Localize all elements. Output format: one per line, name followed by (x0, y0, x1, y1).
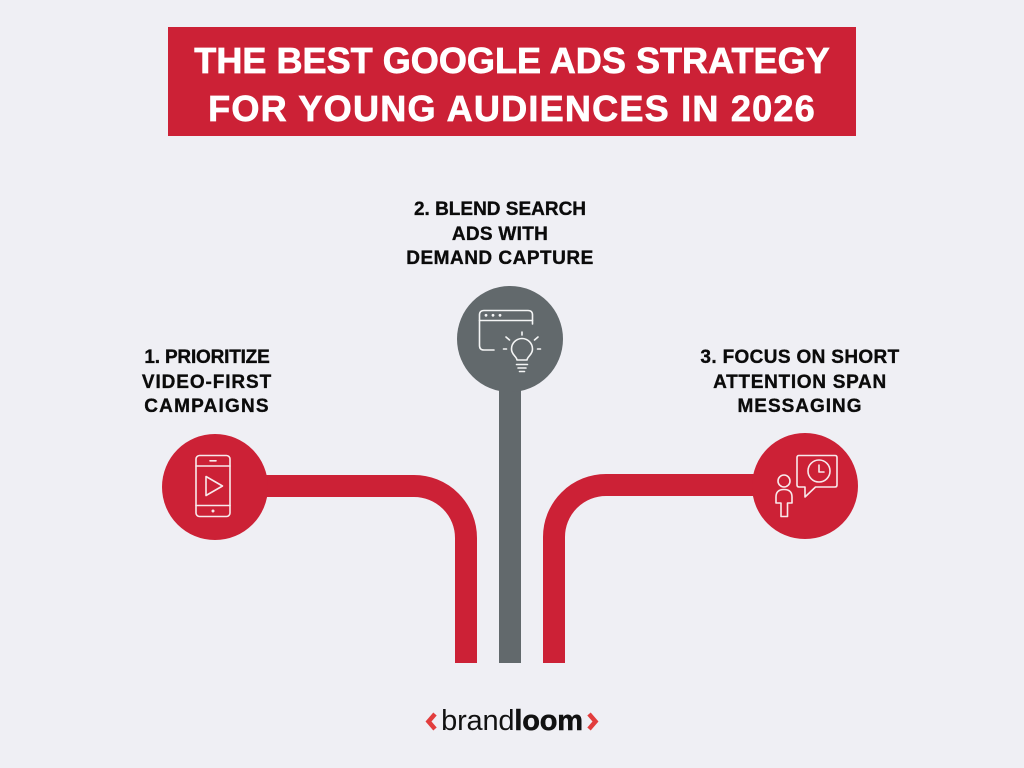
icon: step 1 phone with play (162, 434, 268, 540)
label: step 3: ATTENTION SPAN (713, 372, 887, 392)
label: step 3 (700, 347, 900, 417)
label: step 1: VIDEO-FIRST (142, 372, 272, 392)
title banner (168, 27, 856, 136)
title banner: FOR YOUNG AUDIENCES IN 2026 (208, 88, 816, 129)
label: step 1: 1. PRIORITIZE (144, 347, 270, 368)
logo chevrons (428, 714, 596, 729)
label: step 3: MESSAGING (737, 396, 863, 417)
label: step 3: 3. FOCUS ON SHORT (700, 347, 900, 368)
logo: brandloom: brandloom (441, 705, 583, 737)
label: step 1 (142, 347, 272, 417)
connector: left red (262, 486, 466, 663)
label: step 1: CAMPAIGNS (144, 396, 270, 417)
icon: step 3 person with clock speech bubble (752, 433, 858, 539)
connector: right red (554, 485, 760, 663)
label: step 2 (406, 199, 594, 269)
label: step 2: 2. BLEND SEARCH (414, 199, 586, 220)
label: step 2: DEMAND CAPTURE (406, 248, 594, 269)
title banner: THE BEST GOOGLE ADS STRATEGY (194, 40, 830, 81)
icon: step 2 browser with lightbulb (457, 286, 563, 392)
label: step 2: ADS WITH (452, 224, 548, 244)
connector: center grey (499, 385, 521, 663)
